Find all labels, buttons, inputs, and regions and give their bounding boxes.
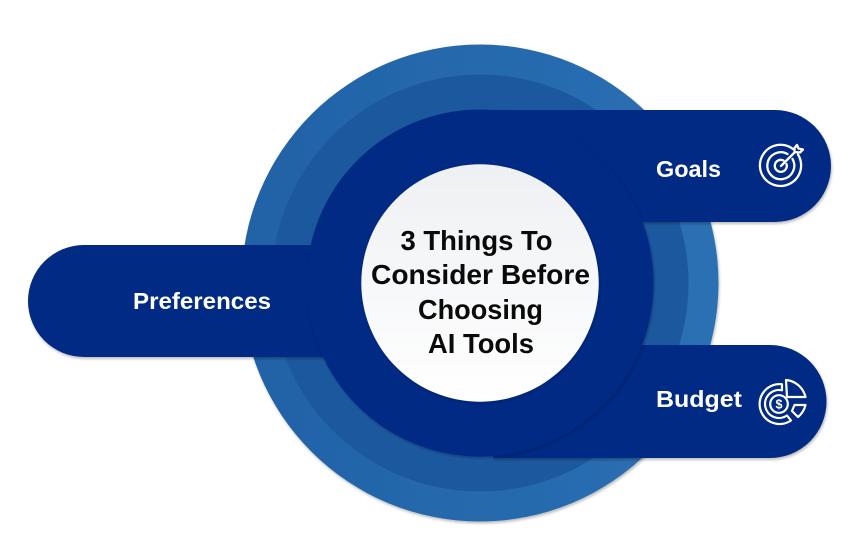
title: Choosing [418,294,543,325]
label: Preferences: Preferences [133,288,271,314]
label: Budget: Budget [656,386,742,412]
middle circle [272,74,688,492]
icon: target [760,145,803,186]
inner dark circle [306,110,654,456]
title: 3 Things To [400,225,552,256]
label: Goals: Goals [656,156,721,182]
pill: Preferences [28,245,330,357]
pill: Budget [493,345,826,458]
central white circle [361,164,599,402]
pill: Goals [480,110,831,222]
title: Consider Before [371,259,590,290]
title: AI Tools [428,328,534,359]
icon: budget chart [760,380,806,424]
title [371,225,590,359]
icon: budget chart: $ [776,398,783,412]
outer circle [242,44,718,522]
